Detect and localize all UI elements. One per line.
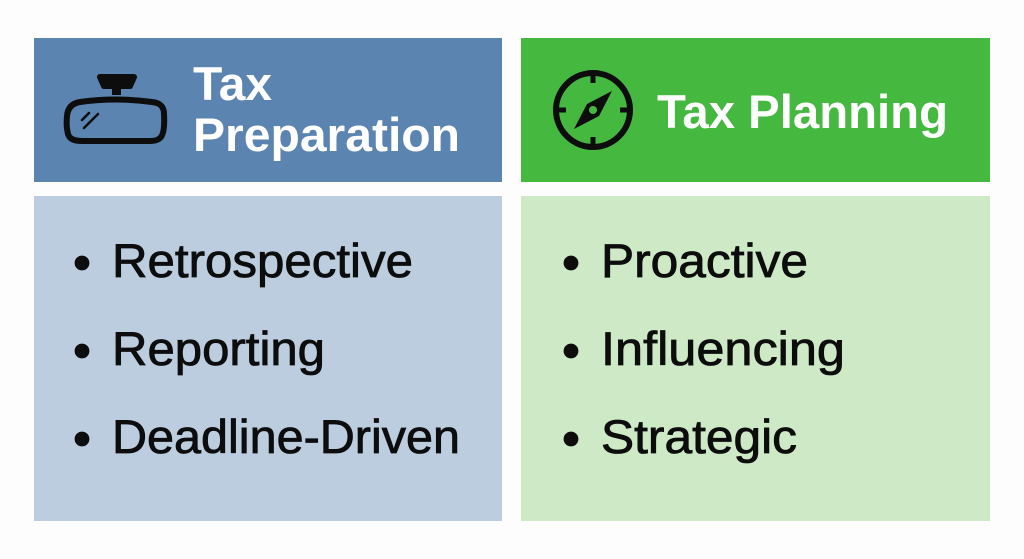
panel: tax planning list: Proactive bbox=[601, 234, 808, 287]
panel: tax preparation header bbox=[34, 38, 502, 182]
panel: tax planning list: Influencing bbox=[601, 322, 845, 375]
icon: compass bbox=[556, 73, 630, 147]
panel: tax planning list bbox=[521, 196, 990, 521]
heading: Tax Preparation: Tax bbox=[193, 57, 272, 110]
panel: tax planning list: Strategic bbox=[601, 410, 797, 463]
heading: Tax Planning: Tax Planning bbox=[657, 85, 948, 138]
panel: tax preparation list: Retrospective bbox=[112, 234, 413, 287]
panel: tax planning header bbox=[521, 38, 990, 182]
icon: rearview mirror bbox=[67, 77, 164, 141]
panel: tax preparation list: Deadline-Driven bbox=[112, 410, 460, 463]
panel: tax preparation list bbox=[34, 196, 502, 521]
panel: tax preparation header: Preparation bbox=[193, 108, 460, 161]
panel: tax preparation list: Reporting bbox=[112, 322, 325, 375]
